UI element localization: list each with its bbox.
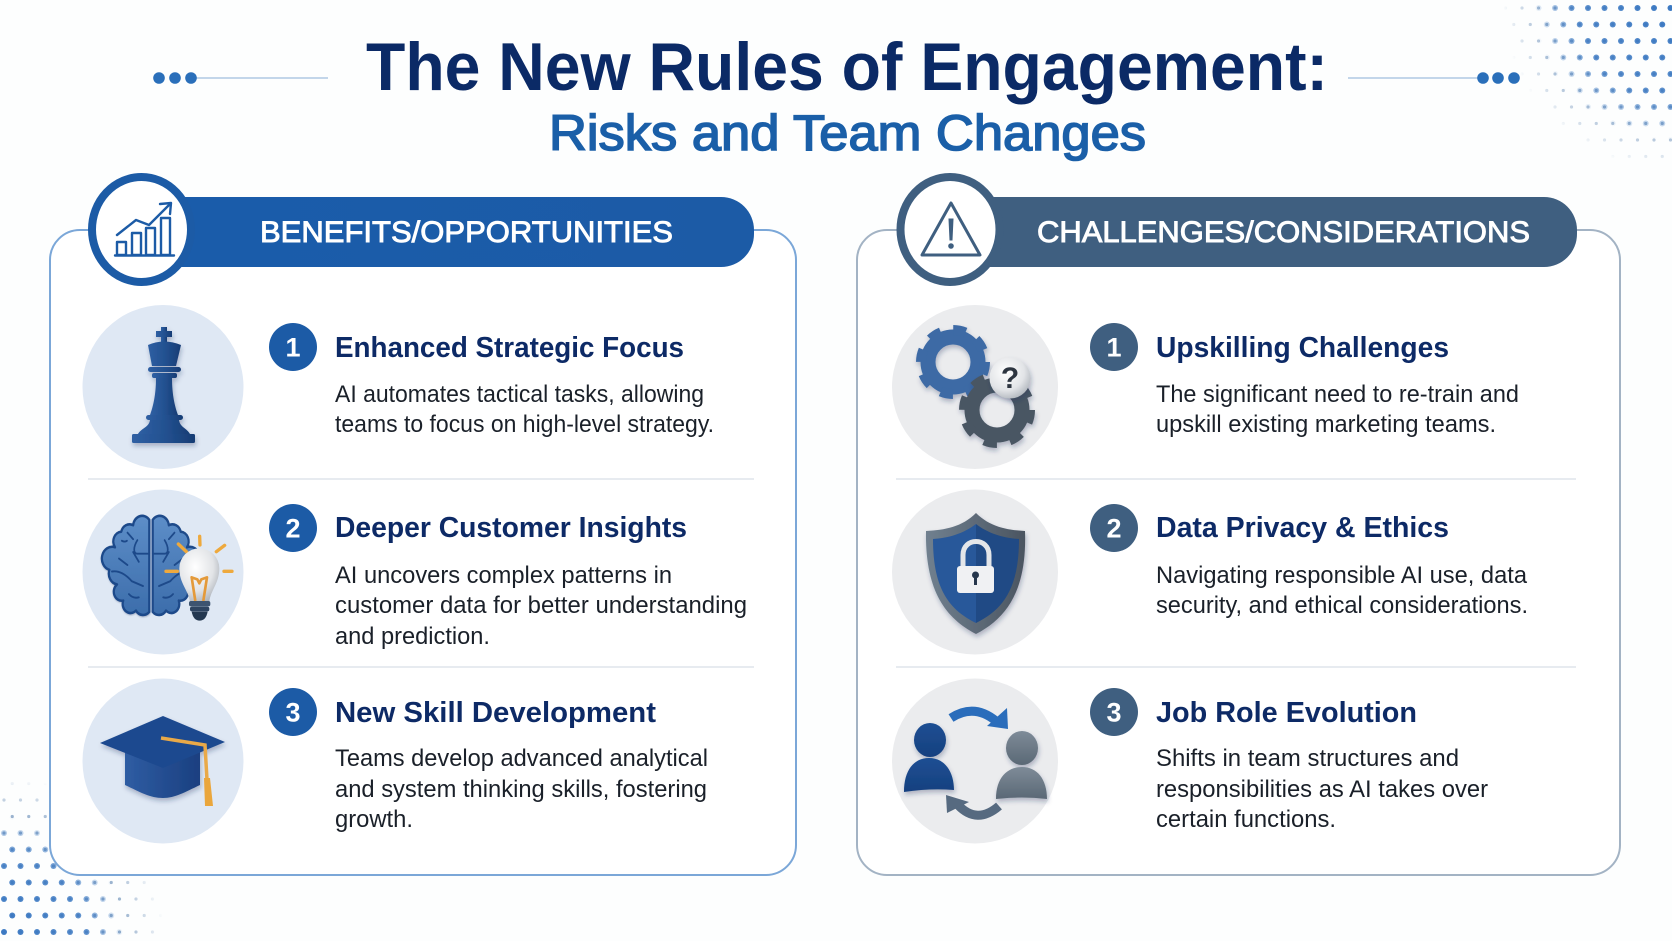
number badge 2 — [269, 504, 317, 552]
number badge 2 — [1090, 504, 1138, 552]
icon: warning triangle badge — [900, 177, 1000, 282]
description: Teams develop advanced analytical — [335, 745, 708, 772]
description — [335, 381, 714, 438]
panel frame — [50, 230, 796, 875]
title ornament right — [1348, 72, 1520, 84]
person right — [996, 731, 1047, 799]
subtitle: Risks and Team Changes — [549, 105, 1146, 161]
item 3: new skill development — [82, 678, 708, 844]
description: customer data for better understanding — [335, 592, 747, 619]
heading: Data Privacy & Ethics — [1156, 512, 1449, 544]
divider lines — [896, 479, 1576, 667]
number badge 1 — [269, 323, 317, 371]
description — [335, 562, 747, 650]
description: Shifts in team structures and — [1156, 745, 1459, 772]
description: teams to focus on high-level strategy. — [335, 411, 714, 438]
description: certain functions. — [1156, 806, 1336, 833]
heading: Upskilling Challenges — [1156, 332, 1449, 364]
number badge 1 — [1090, 323, 1138, 371]
number badge 3: 3 — [285, 698, 301, 728]
number badge 2: 2 — [285, 514, 301, 544]
icon: shield with padlock — [892, 490, 1058, 654]
icon: brain and light bulb — [82, 490, 244, 654]
header label: CHALLENGES/CONSIDERATIONS — [1037, 216, 1530, 249]
description: The significant need to re-train and — [1156, 381, 1519, 408]
description: AI automates tactical tasks, allowing — [335, 381, 704, 408]
icon: gears with question mark: ? — [1001, 362, 1019, 395]
number badge 3 — [1090, 688, 1138, 736]
title ornament left — [153, 72, 328, 84]
description: and prediction. — [335, 623, 490, 650]
item 2: data privacy & ethics — [892, 490, 1528, 654]
description — [335, 745, 708, 833]
divider lines — [88, 479, 754, 667]
description — [1156, 381, 1519, 438]
header band — [940, 197, 1577, 267]
icon: growth chart badge — [92, 177, 191, 282]
heading: Deeper Customer Insights — [335, 512, 687, 544]
header: title block — [153, 29, 1520, 161]
item 3: job role evolution — [892, 678, 1488, 844]
number badge 3 — [269, 688, 317, 736]
item 1: upskilling challenges — [892, 305, 1519, 469]
number badge 1: 1 — [1106, 332, 1122, 362]
icon: people exchanging roles — [892, 678, 1058, 844]
item 2: deeper customer insights — [82, 490, 747, 654]
description: Navigating responsible AI use, data — [1156, 562, 1528, 589]
title: The New Rules of Engagement: — [366, 29, 1328, 105]
heading: Job Role Evolution — [1156, 697, 1417, 729]
description: AI uncovers complex patterns in — [335, 562, 672, 589]
arrow top — [951, 708, 1008, 729]
number badge 3: 3 — [1106, 698, 1122, 728]
heading: New Skill Development — [335, 697, 656, 729]
panel: challenges/considerations — [857, 177, 1620, 875]
description: security, and ethical considerations. — [1156, 592, 1528, 619]
description: responsibilities as AI takes over — [1156, 776, 1488, 803]
item 1: enhanced strategic focus — [82, 305, 714, 469]
heading: Enhanced Strategic Focus — [335, 332, 684, 364]
header band — [130, 197, 754, 267]
panel frame — [857, 230, 1620, 875]
panel: benefits/opportunities — [50, 177, 796, 875]
number badge 2: 2 — [1106, 514, 1122, 544]
icon: chess king — [82, 305, 244, 469]
icon: graduation cap — [82, 678, 244, 844]
description — [1156, 562, 1528, 619]
number badge 1: 1 — [285, 332, 301, 362]
description: and system thinking skills, fostering — [335, 776, 707, 803]
header label: BENEFITS/OPPORTUNITIES — [260, 216, 673, 249]
arrow bottom — [946, 795, 999, 815]
description: upskill existing marketing teams. — [1156, 411, 1496, 438]
icon: gears with question mark — [892, 305, 1058, 469]
person left — [904, 723, 954, 792]
description: growth. — [335, 806, 413, 833]
description — [1156, 745, 1488, 833]
